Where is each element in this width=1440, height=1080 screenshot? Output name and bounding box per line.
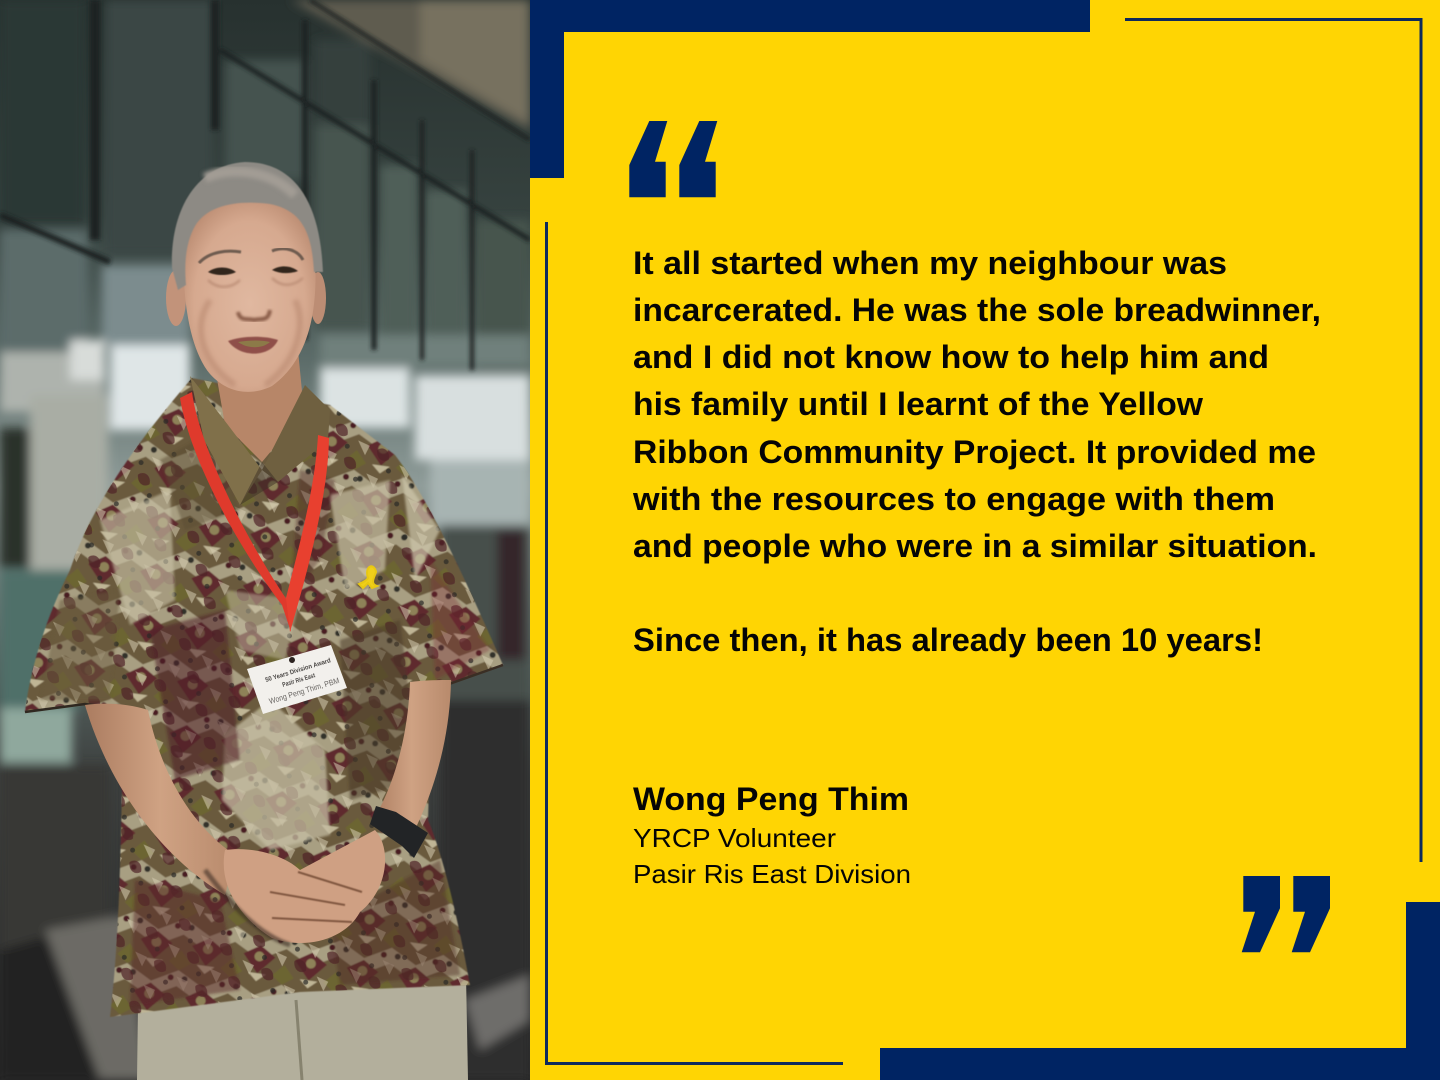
man: trousers [137, 975, 468, 1080]
man: head and face [166, 162, 326, 392]
quote text: and people who were in a similar situation. [633, 528, 1317, 564]
name badge [247, 645, 347, 714]
man: clasped hands [205, 830, 385, 945]
shirt: large cream and maroon motifs [40, 430, 490, 1005]
attribution: name and role [633, 781, 911, 889]
face shape [184, 196, 316, 392]
man: forearms [85, 680, 451, 895]
quote text: with the resources to engage with them [632, 481, 1275, 517]
name badge: Pasir Ris East [282, 672, 317, 689]
eyebrows [199, 249, 303, 263]
frame: thin line top-right [1125, 20, 1421, 862]
icon: closing quotation mark [1242, 876, 1330, 952]
quote text: Since then, it has already been 10 years! [633, 622, 1263, 658]
quote text: his family until I learnt of the Yellow [633, 386, 1203, 422]
attribution: name and role: Pasir Ris East Division [633, 859, 911, 889]
eyes [208, 266, 298, 275]
photo: portrait of Wong Peng Thim [0, 0, 530, 1080]
nose [238, 310, 270, 320]
name badge: 50 Years Division Award [265, 657, 332, 684]
background: yellow panel [530, 0, 1440, 1080]
mouth [228, 337, 278, 354]
lanyard: red ribbon [180, 392, 329, 632]
frame: navy corner bottom-right [880, 902, 1440, 1080]
frame: thin line bottom-left [546, 222, 843, 1064]
attribution: name and role: YRCP Volunteer [633, 823, 836, 853]
frame: navy corner top-left [530, 0, 1090, 178]
ears [166, 270, 186, 326]
quote text: Ribbon Community Project. It provided me [633, 434, 1316, 470]
cheek and chin shading [201, 300, 235, 385]
name badge: Wong Peng Thim, PBM [268, 676, 341, 706]
quote text: incarcerated. He was the sole breadwinner, [633, 292, 1321, 328]
man: neck and collar [190, 350, 330, 505]
attribution: name and role: Wong Peng Thim [633, 781, 909, 817]
icon: opening quotation mark [629, 121, 717, 197]
yellow ribbon pin [359, 566, 377, 588]
quote text: and I did not know how to help him and [633, 339, 1269, 375]
photo background: blurred terminal interior [0, 0, 530, 1080]
quote text: It all started when my neighbour was [633, 245, 1227, 281]
wristwatch [370, 806, 428, 858]
hair [172, 162, 323, 290]
man: batik shirt [25, 378, 503, 1017]
quote text [632, 245, 1321, 658]
